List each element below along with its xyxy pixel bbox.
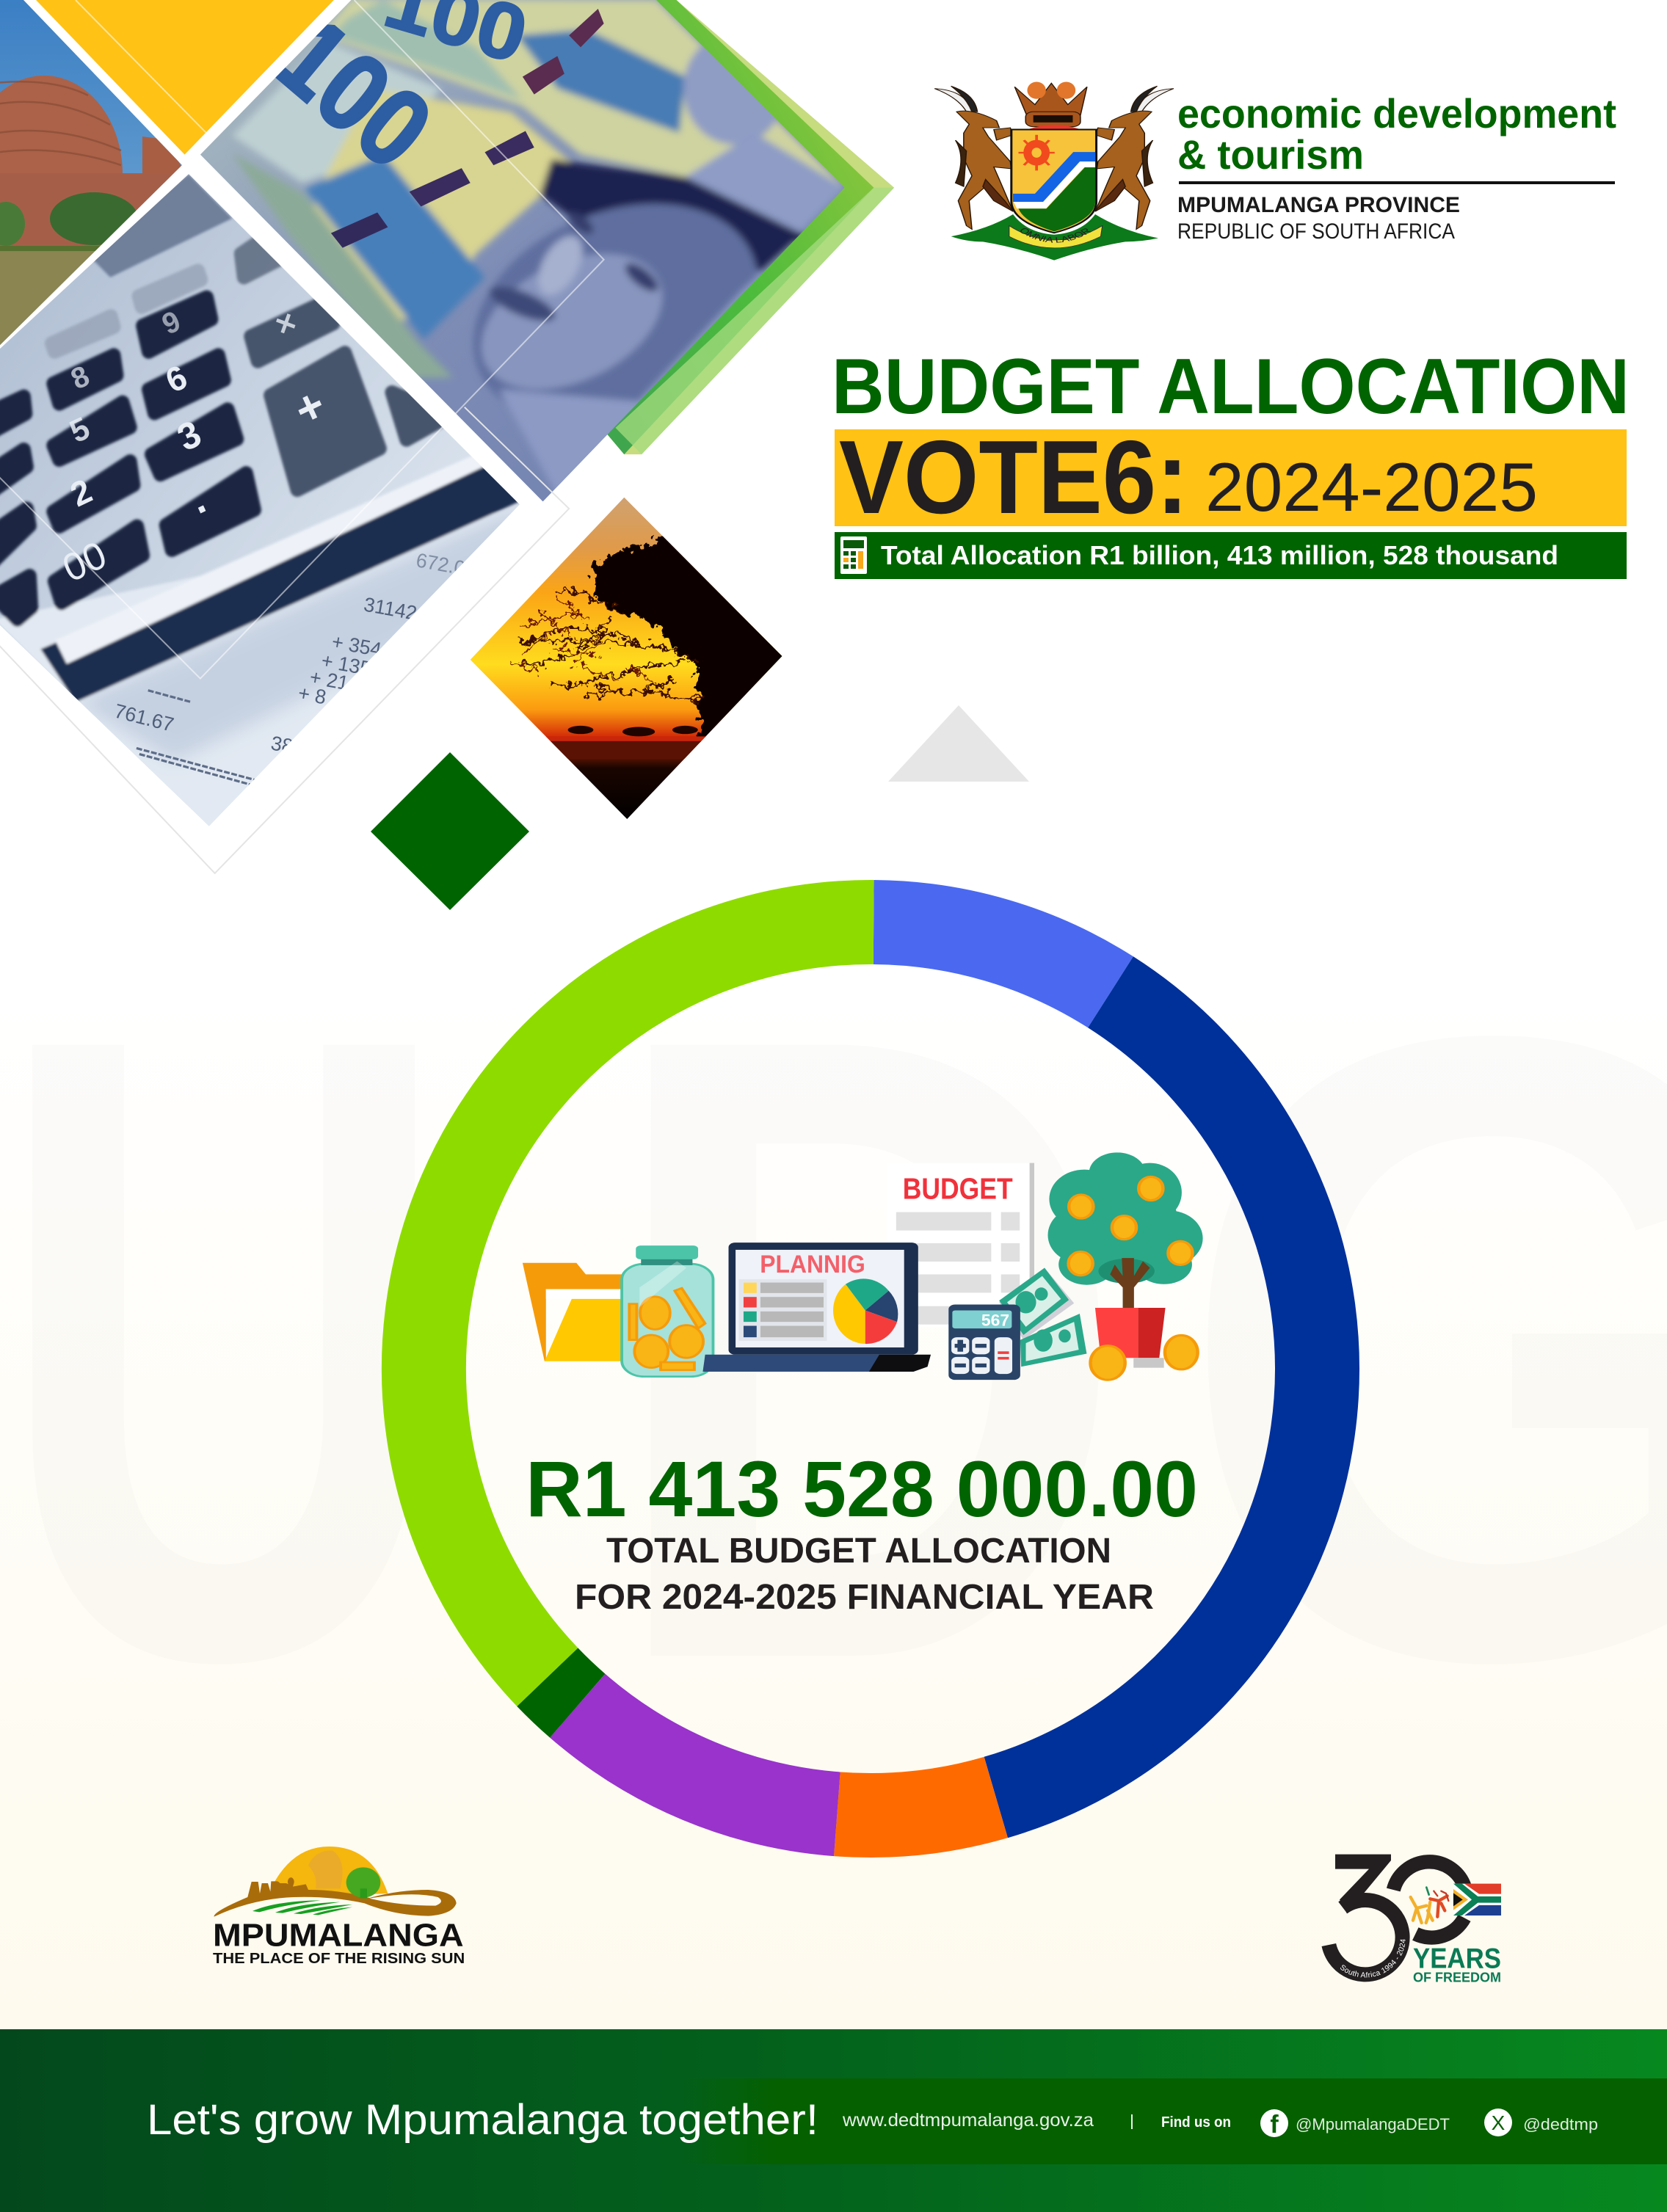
total allocation bar [835,532,1627,579]
donut chart [424,922,1317,1816]
vote banner: VOTE6: [839,419,1188,536]
total allocation bar: Total Allocation R1 billion, 413 million, 528 thousand [881,540,1558,570]
department name: & tourism [1177,131,1364,178]
decorative thin diamond lines [0,0,604,679]
province text [1177,193,1460,244]
province text: MPUMALANGA PROVINCE [1177,193,1460,217]
30 years of freedom logo: South Africa 1994 - 2024 [1340,1939,1406,1978]
department name: economic development [1177,90,1616,137]
photo: building under blue sky [0,0,191,352]
green chevrons behind money photo [607,0,894,454]
calculator key legends: 00 [57,533,113,591]
icon: budget document: BUDGET [903,1172,1013,1206]
icon: planning laptop: PLANNIG [760,1250,865,1278]
calculator key legends: . [182,476,212,523]
ledger figures: 761.67 [112,699,176,736]
ledger figures [112,548,467,757]
coat of arms [934,82,1174,261]
icon: crown [1014,81,1087,129]
total amount: R1 413 528 000.00 [526,1444,1198,1533]
find us on: Find us on [1161,2114,1231,2131]
icon: coin jar [622,1245,713,1377]
total caption [575,1532,1154,1617]
decorative triangle: grey [888,705,1029,782]
icon: money tree [1048,1152,1203,1380]
icon: planning laptop [702,1243,931,1372]
total caption: TOTAL BUDGET ALLOCATION [606,1532,1111,1571]
pie chart [833,1278,898,1344]
facebook handle: @MpumalangaDEDT [1296,2115,1450,2133]
Mpumalanga logo: MPUMALANGA [213,1918,464,1954]
province text: REPUBLIC OF SOUTH AFRICA [1177,219,1455,244]
icon: X: X [1492,2111,1506,2134]
30 years of freedom logo: OF FREEDOM [1413,1970,1501,1985]
decorative diamond: dark green [371,752,529,910]
icon: facebook: f [1270,2111,1279,2139]
icon: facebook [1260,2109,1288,2139]
website: www.dedtmpumalanga.gov.za [842,2110,1094,2131]
ledger figures: 38 [269,731,295,757]
Mpumalanga logo: THE PLACE OF THE RISING SUN [213,1950,465,1967]
calculator key legends [57,303,333,591]
icon: X [1484,2109,1512,2136]
calculator key legends: 6 [160,357,193,400]
ledger figures: 31142 [362,592,418,625]
calculator key legends: 5 [65,410,95,450]
icon: South African flag [1453,1884,1501,1916]
total caption: FOR 2024-2025 FINANCIAL YEAR [575,1578,1154,1617]
photo: acacia tree at sunset [470,498,782,819]
icon: shield [1012,129,1097,233]
ledger figures: + 354 [330,630,383,661]
icon: kudu supporters [934,86,1013,229]
budget illustration [523,1152,1203,1380]
icon: calculator [840,536,867,574]
30 years of freedom logo [1321,1854,1501,1985]
icon: folder [523,1263,631,1361]
icon: budget document [887,1163,1034,1327]
calculator key legends: 2 [65,471,98,514]
calculator key legends: 8 [66,360,94,396]
slogan: Let's grow Mpumalanga together! [147,2096,818,2144]
footer [0,2029,1667,2212]
icon: motto scroll: OMNIA LABOR VINCIT [1020,228,1091,243]
watermark letters [0,853,1667,1844]
X handle: @dedtmp [1523,2115,1598,2133]
calculator key legends: 3 [171,412,207,459]
icon: calculator: 567 [981,1311,1009,1329]
vote banner [835,419,1627,536]
vote banner: 2024-2025 [1205,448,1538,525]
curved anniversary text [1340,1938,1406,1978]
icon: dancing figures [1411,1888,1448,1923]
Mpumalanga logo [213,1847,465,1967]
photo: rand banknotes [192,0,854,507]
calculator key legends: 9 [157,305,186,341]
icon: motto scroll [951,214,1158,261]
department name [1177,90,1616,178]
photo collage [0,0,894,873]
ledger figures: 672.0 [415,548,467,580]
decorative diamond: yellow [36,0,334,155]
calculator key legends: + [286,377,333,437]
photo: calculator and ledger [0,165,529,832]
icon: calculator [948,1304,1020,1380]
30 years of freedom logo: YEARS [1413,1943,1501,1975]
ledger figures: + 21 [308,665,350,694]
icon: banknotes [999,1267,1086,1367]
ledger figures: + 135 [320,649,373,680]
title: BUDGET ALLOCATION [832,342,1630,430]
ledger figures: + 8 [297,681,328,708]
calculator key legends: × [269,303,302,344]
